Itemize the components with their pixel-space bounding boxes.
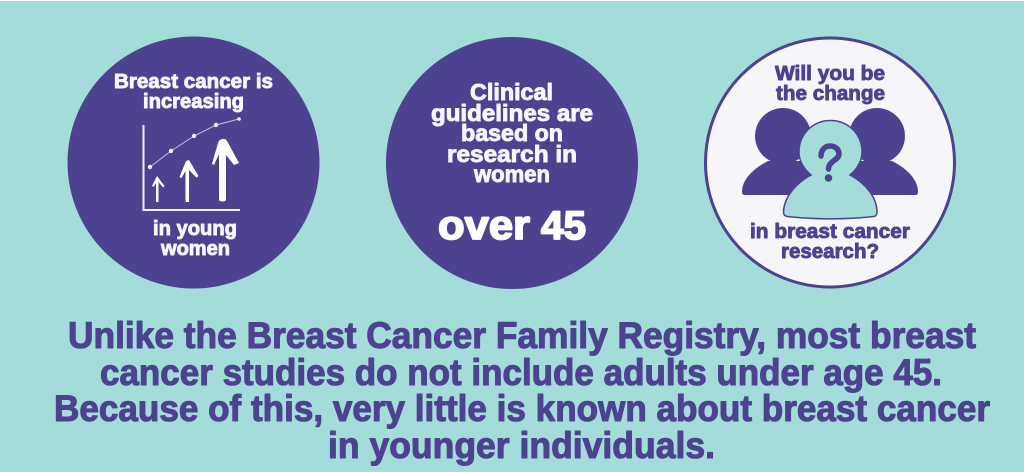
panel: will you be the change (706, 38, 954, 287)
heading: will you be the change: the change (776, 83, 885, 105)
caption: in breast cancer research (750, 221, 910, 263)
text block: explanation: cancer studies do not include adults under age 45. (100, 352, 942, 393)
text: clinical guidelines are based on research in women: guidelines are (431, 100, 593, 126)
stat: over 45: over (438, 202, 530, 248)
heading: breast cancer is increasing: Breast cancer is (114, 71, 273, 93)
text: clinical guidelines are based on research in women (431, 79, 593, 187)
panel: clinical guidelines (386, 37, 638, 289)
icon: question mark (821, 146, 839, 182)
heading: breast cancer is increasing: increasing (143, 91, 244, 113)
text block: explanation: Unlike the Breast Cancer Family Registry, most breast (68, 315, 976, 356)
heading: will you be the change: Will you be (775, 63, 885, 85)
heading: breast cancer is increasing (114, 71, 273, 113)
chart: rising line with arrows (144, 117, 241, 210)
caption: in young women (153, 218, 237, 260)
text: clinical guidelines are based on research in women: research in (447, 141, 577, 167)
caption: in breast cancer research: research? (781, 241, 879, 263)
caption: in breast cancer research: in breast cancer (750, 221, 910, 243)
text block: explanation: Because of this, very little is known about breast cancer (54, 388, 990, 429)
text block: explanation: in younger individuals. (328, 425, 715, 466)
caption: in young women: in young (153, 218, 237, 240)
text: clinical guidelines are based on research in women: women (473, 161, 550, 187)
icon: three people with question mark (742, 108, 918, 219)
text: clinical guidelines are based on research in women: based on (461, 120, 563, 146)
stat: over 45 (438, 202, 586, 248)
panel: breast cancer is increasing (68, 36, 320, 288)
caption: in young women: women (160, 238, 230, 260)
text block: explanation (54, 315, 990, 466)
stat: over 45: 45 (541, 204, 586, 248)
heading: will you be the change (775, 63, 885, 105)
text: clinical guidelines are based on research in women: Clinical (470, 79, 553, 105)
